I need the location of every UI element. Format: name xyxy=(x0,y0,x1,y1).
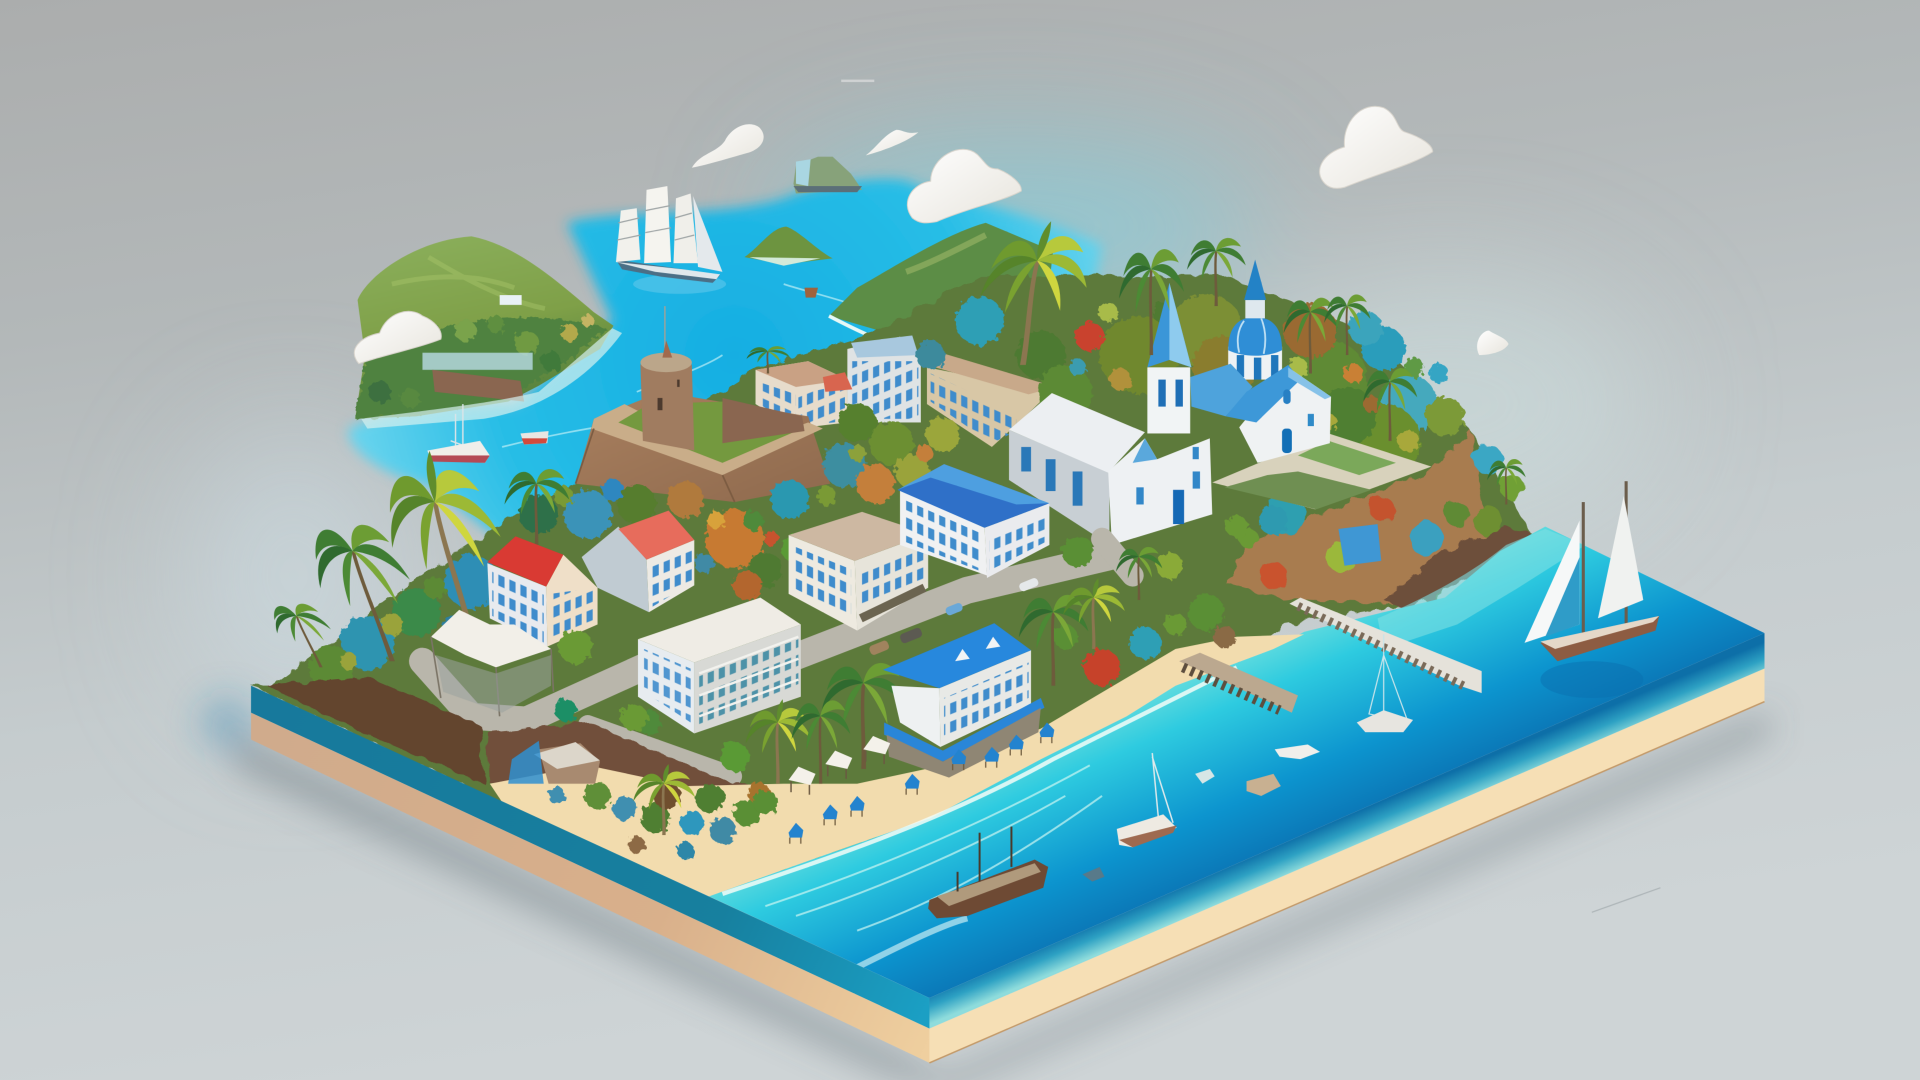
far island xyxy=(793,157,862,193)
red motor boat xyxy=(520,431,549,444)
small green islet xyxy=(744,227,833,266)
small cliff hut xyxy=(1338,524,1381,566)
drum xyxy=(1228,347,1282,380)
slab left side: water layer xyxy=(251,686,929,1029)
small moored boat xyxy=(804,288,818,298)
sailboat in left bay xyxy=(427,404,490,463)
upper sea foam at rocks xyxy=(1378,529,1586,649)
beach sand xyxy=(490,634,1304,931)
left brown cliff xyxy=(267,677,784,808)
slab right side: water layer xyxy=(929,633,1764,1029)
slab right side: sand layer xyxy=(929,669,1764,1063)
side blue roofs xyxy=(1190,364,1253,416)
sand bottom edge line xyxy=(929,702,1764,1063)
red-roof house xyxy=(487,536,598,647)
left green hill island xyxy=(355,236,622,429)
cars on road xyxy=(868,577,1039,656)
nave walls xyxy=(1009,430,1109,545)
cloud 5 xyxy=(354,311,441,364)
swimmer skiff xyxy=(1082,867,1104,882)
round tower xyxy=(640,306,694,451)
main land base xyxy=(251,276,1531,888)
moored catamaran xyxy=(1357,634,1413,732)
dome xyxy=(1228,317,1282,356)
sailing yacht xyxy=(1524,481,1659,698)
white beach tent xyxy=(431,610,553,716)
dinghy xyxy=(1195,769,1215,784)
slab left side: sand layer xyxy=(251,713,929,1063)
cloud 2 xyxy=(866,130,918,156)
right green hill xyxy=(829,223,1053,355)
right cliff xyxy=(1226,430,1538,610)
townhouse 2 xyxy=(847,337,921,422)
central foliage between fort and hotels xyxy=(309,403,987,689)
seaside blue-roof hotel xyxy=(883,623,1044,778)
cloud 3 xyxy=(907,149,1021,223)
cloud 4 xyxy=(1320,106,1433,188)
small bay boats xyxy=(427,288,818,463)
tall palm xyxy=(366,451,528,637)
white church with steeple xyxy=(1009,283,1212,545)
cloud 6 xyxy=(1477,331,1509,355)
slab cast shadow xyxy=(200,696,1769,1080)
right upper foliage xyxy=(916,294,1464,478)
long beige building xyxy=(927,367,1051,447)
back bay water xyxy=(348,179,1102,551)
wooden fishing boat xyxy=(857,827,1048,967)
white facade xyxy=(1239,367,1331,463)
speedboat xyxy=(1275,744,1320,759)
tiny illegible mark at top xyxy=(841,80,874,82)
water surface xyxy=(709,527,1764,998)
red accent roof xyxy=(823,372,852,392)
blue-dome church xyxy=(1190,260,1331,463)
stone fort xyxy=(576,306,830,502)
townhouse 1 xyxy=(756,361,847,429)
wooden piers xyxy=(1179,598,1482,713)
front foliage and palms xyxy=(555,221,1526,835)
roads xyxy=(422,539,1133,776)
steeple tower xyxy=(1147,367,1190,433)
small white boats xyxy=(1082,634,1413,882)
terrace of blue-dome church xyxy=(1212,433,1431,509)
beige hotel xyxy=(789,512,928,631)
front facade xyxy=(1108,438,1212,545)
coral-roof house xyxy=(582,511,694,612)
nave roof xyxy=(1009,393,1145,473)
beach hut xyxy=(508,741,600,784)
sailboat mid water xyxy=(1117,753,1177,847)
background buildings behind the fort xyxy=(756,336,1056,447)
beach umbrellas and cabanas xyxy=(789,722,1054,844)
white modern building xyxy=(638,598,801,733)
back palm xyxy=(504,469,569,545)
beachfront foliage field xyxy=(549,782,770,860)
clouds xyxy=(354,106,1509,364)
blue spire xyxy=(1147,283,1191,367)
small palm xyxy=(263,604,349,667)
sky glow xyxy=(184,141,1653,722)
left-hand palms xyxy=(263,346,790,667)
middle palm xyxy=(298,525,439,661)
hotel awning xyxy=(884,698,1044,762)
faint streak on ground xyxy=(1592,888,1660,912)
tender xyxy=(1247,774,1281,796)
lantern and spire xyxy=(1245,300,1265,318)
blue-roof hotel xyxy=(898,464,1049,578)
shore foliage xyxy=(555,506,1288,814)
three-masted sailing ship xyxy=(616,186,726,294)
fort-side palm xyxy=(746,346,790,373)
cloud 1 xyxy=(692,124,764,168)
